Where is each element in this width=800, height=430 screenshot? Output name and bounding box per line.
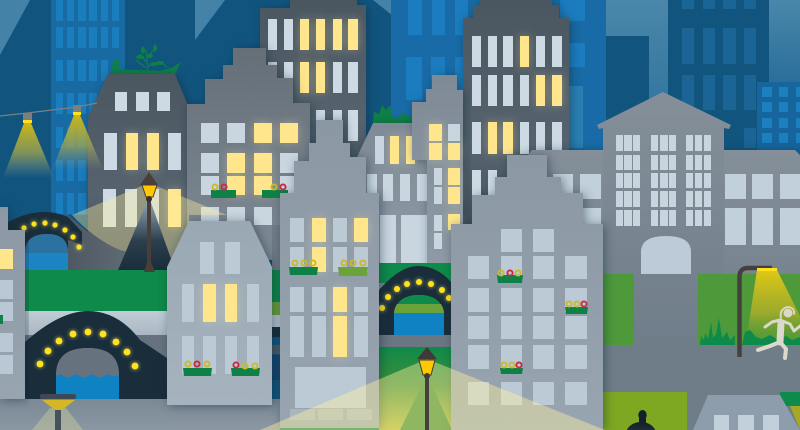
canal wall band — [25, 311, 167, 335]
stepped gray building — [187, 48, 310, 260]
green lawns — [603, 274, 634, 345]
light cone — [3, 123, 54, 178]
bridge — [379, 266, 451, 335]
green bank — [25, 270, 167, 311]
water — [394, 313, 444, 335]
central hall with roof — [597, 92, 731, 392]
front centre building — [280, 120, 379, 428]
dark person — [626, 410, 656, 430]
strip between buildings — [272, 225, 282, 380]
cable — [0, 103, 97, 116]
quay — [379, 335, 451, 347]
lower bridge water — [56, 374, 119, 399]
head — [417, 347, 437, 379]
roof plants centre — [373, 105, 412, 123]
lamp light cone left — [72, 183, 227, 259]
dark gable building left — [88, 74, 187, 270]
light cone — [52, 115, 103, 170]
window planter — [211, 184, 236, 198]
window planter — [231, 362, 260, 376]
centre canal strip — [379, 263, 452, 430]
entrance steps — [290, 409, 372, 420]
window planter — [500, 362, 523, 374]
small blue block right — [757, 82, 800, 154]
dark blue tower right — [668, 0, 769, 150]
gable gray building centre — [357, 123, 428, 270]
bridge lights — [379, 279, 452, 311]
olive lawn — [603, 392, 687, 430]
green corner — [780, 392, 800, 430]
small lower building — [693, 395, 800, 430]
left edge building — [0, 207, 25, 399]
fixture — [23, 113, 32, 123]
street lamp centre — [260, 347, 605, 430]
park lamp with runner — [740, 268, 800, 358]
upper bridge arch opening — [25, 234, 68, 270]
big right building — [520, 92, 800, 392]
window planter — [338, 260, 368, 276]
narrow stepped gable — [412, 75, 463, 270]
fixture — [73, 105, 81, 115]
lamp light strip — [757, 268, 777, 271]
window planter — [262, 184, 288, 198]
wing windows — [553, 174, 800, 245]
lamp light dark cone and post — [118, 172, 175, 272]
upper bridge — [8, 212, 82, 270]
left canal scene with bridges — [8, 212, 167, 399]
window planter — [497, 270, 523, 283]
window planter — [565, 301, 588, 314]
lit hillside behind upper bridge — [25, 215, 167, 270]
street left — [0, 399, 285, 430]
blue tower centre — [391, 0, 606, 150]
string lights — [0, 103, 103, 178]
post — [425, 375, 429, 430]
bridge lights — [21, 220, 138, 369]
runner — [758, 307, 800, 358]
lamp pole — [740, 268, 772, 357]
lower bridge arch opening — [56, 348, 119, 375]
light cone — [746, 270, 800, 342]
street lamp bottom left — [32, 394, 83, 430]
front right stepped building — [451, 155, 603, 430]
view through arch — [394, 295, 444, 318]
lower right ground — [603, 345, 800, 430]
pale tower with dark block — [606, 0, 800, 150]
roof plants left — [110, 44, 180, 74]
lamp head — [140, 172, 158, 202]
hall window grids — [616, 135, 711, 226]
ground strip under centre building — [280, 428, 379, 430]
upper bridge water — [25, 253, 68, 270]
grass in front of the light — [742, 330, 800, 345]
lower bridge — [25, 311, 167, 399]
front gable building — [167, 221, 272, 405]
tall dark tower centre-left — [260, 0, 366, 200]
arched door — [641, 236, 691, 274]
window planter — [289, 260, 318, 275]
wing — [520, 150, 800, 392]
blue tower left — [51, 0, 125, 215]
window planter — [183, 361, 212, 376]
grass and plant left of lamp — [700, 318, 735, 345]
tall dark tower centre-right — [463, 0, 569, 240]
light cone — [260, 359, 605, 430]
green field — [379, 347, 451, 430]
light sky triangles — [0, 0, 392, 55]
